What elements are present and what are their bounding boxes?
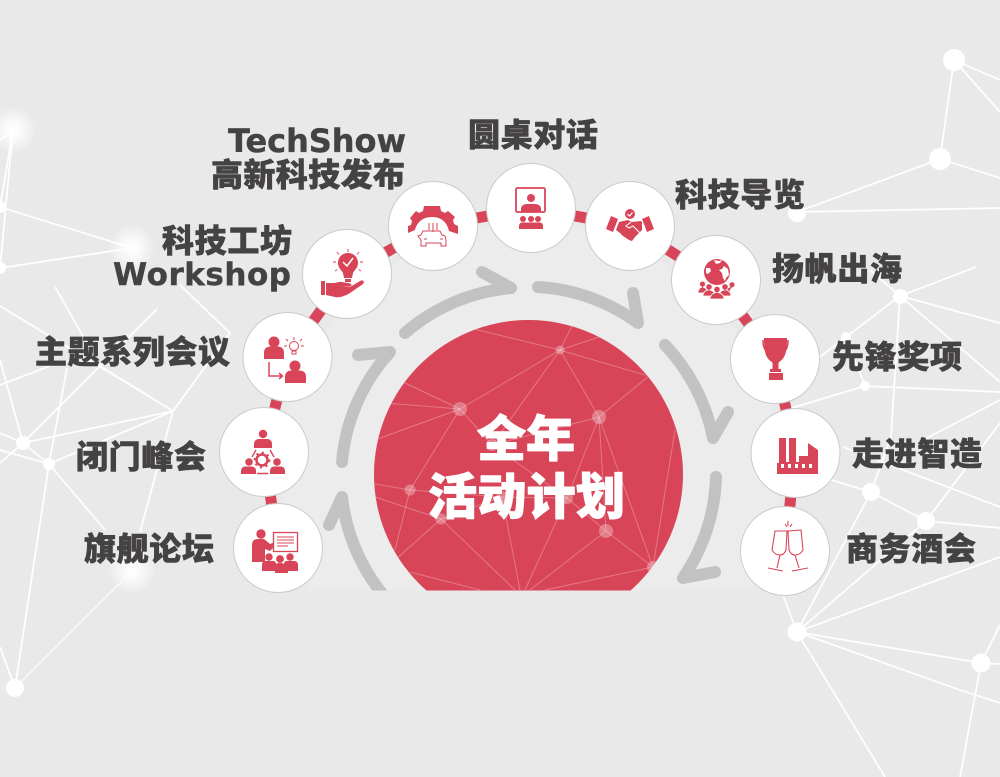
label: 旗舰论坛: 旗舰论坛 [84, 531, 214, 567]
label: 走进智造: 走进智造 [852, 436, 982, 472]
label: 科技导览: 科技导览 [675, 177, 805, 213]
arrow 6 [683, 477, 716, 578]
central red circle [374, 320, 683, 590]
icon: handshake [606, 209, 654, 241]
node: 闭门峰会 [220, 408, 308, 496]
label: 科技工坊 Workshop [113, 223, 292, 293]
circular grey arrows [329, 272, 728, 608]
arrow 4 [538, 287, 638, 323]
node: 扬帆出海 [672, 236, 760, 324]
icon: presenter with audience [252, 529, 298, 573]
icon: speaker on screen with audience [516, 188, 545, 229]
label: 商务酒会: 商务酒会 [846, 531, 976, 567]
node: 旗舰论坛 [234, 504, 322, 592]
node: 走进智造 [751, 408, 840, 498]
node: 科技导览 [586, 182, 674, 270]
label: TechShow 高新科技发布 [211, 122, 406, 193]
icon: gear and smart car [408, 206, 458, 246]
background network: left [0, 130, 230, 688]
node: 商务酒会 [740, 506, 830, 596]
node: 科技工坊 [302, 230, 392, 318]
red connecting arc [264, 208, 796, 551]
icon: champagne toast [768, 521, 808, 571]
title [428, 413, 625, 525]
icon: people sharing idea [264, 336, 306, 383]
arrow 3 [405, 272, 511, 333]
label: 主题系列会议: 主题系列会议 [35, 334, 230, 370]
node: TechShow [388, 182, 478, 270]
label: TechShow 高新科技发布: TechShow [228, 122, 406, 160]
icon: team around gear [241, 430, 285, 474]
arrow 2 [342, 352, 390, 462]
node: 主题系列会议 [243, 312, 332, 402]
icon: factory [777, 438, 818, 474]
label: 科技工坊 Workshop: Workshop [113, 257, 291, 293]
arrow 1 [323, 491, 388, 590]
central lighter disc [280, 224, 780, 724]
icon: hand holding bulb [321, 249, 364, 297]
label: 先锋奖项: 先锋奖项 [832, 339, 962, 375]
label: 扬帆出海: 扬帆出海 [772, 251, 902, 287]
label: TechShow 高新科技发布: 高新科技发布 [211, 157, 405, 193]
icon: globe with people [698, 259, 735, 299]
background network: right [783, 60, 1000, 777]
label: 圆桌对话: 圆桌对话 [468, 117, 598, 153]
label: 科技工坊 Workshop: 科技工坊 [162, 223, 292, 259]
node: 先锋奖项 [730, 314, 820, 404]
title: 活动计划 [428, 471, 625, 525]
arrow 5 [665, 345, 728, 438]
node: 圆桌对话 [486, 164, 576, 252]
inner network [375, 320, 675, 590]
label: 闭门峰会: 闭门峰会 [76, 439, 206, 475]
title: 全年 [477, 413, 575, 467]
icon: trophy [763, 338, 788, 380]
